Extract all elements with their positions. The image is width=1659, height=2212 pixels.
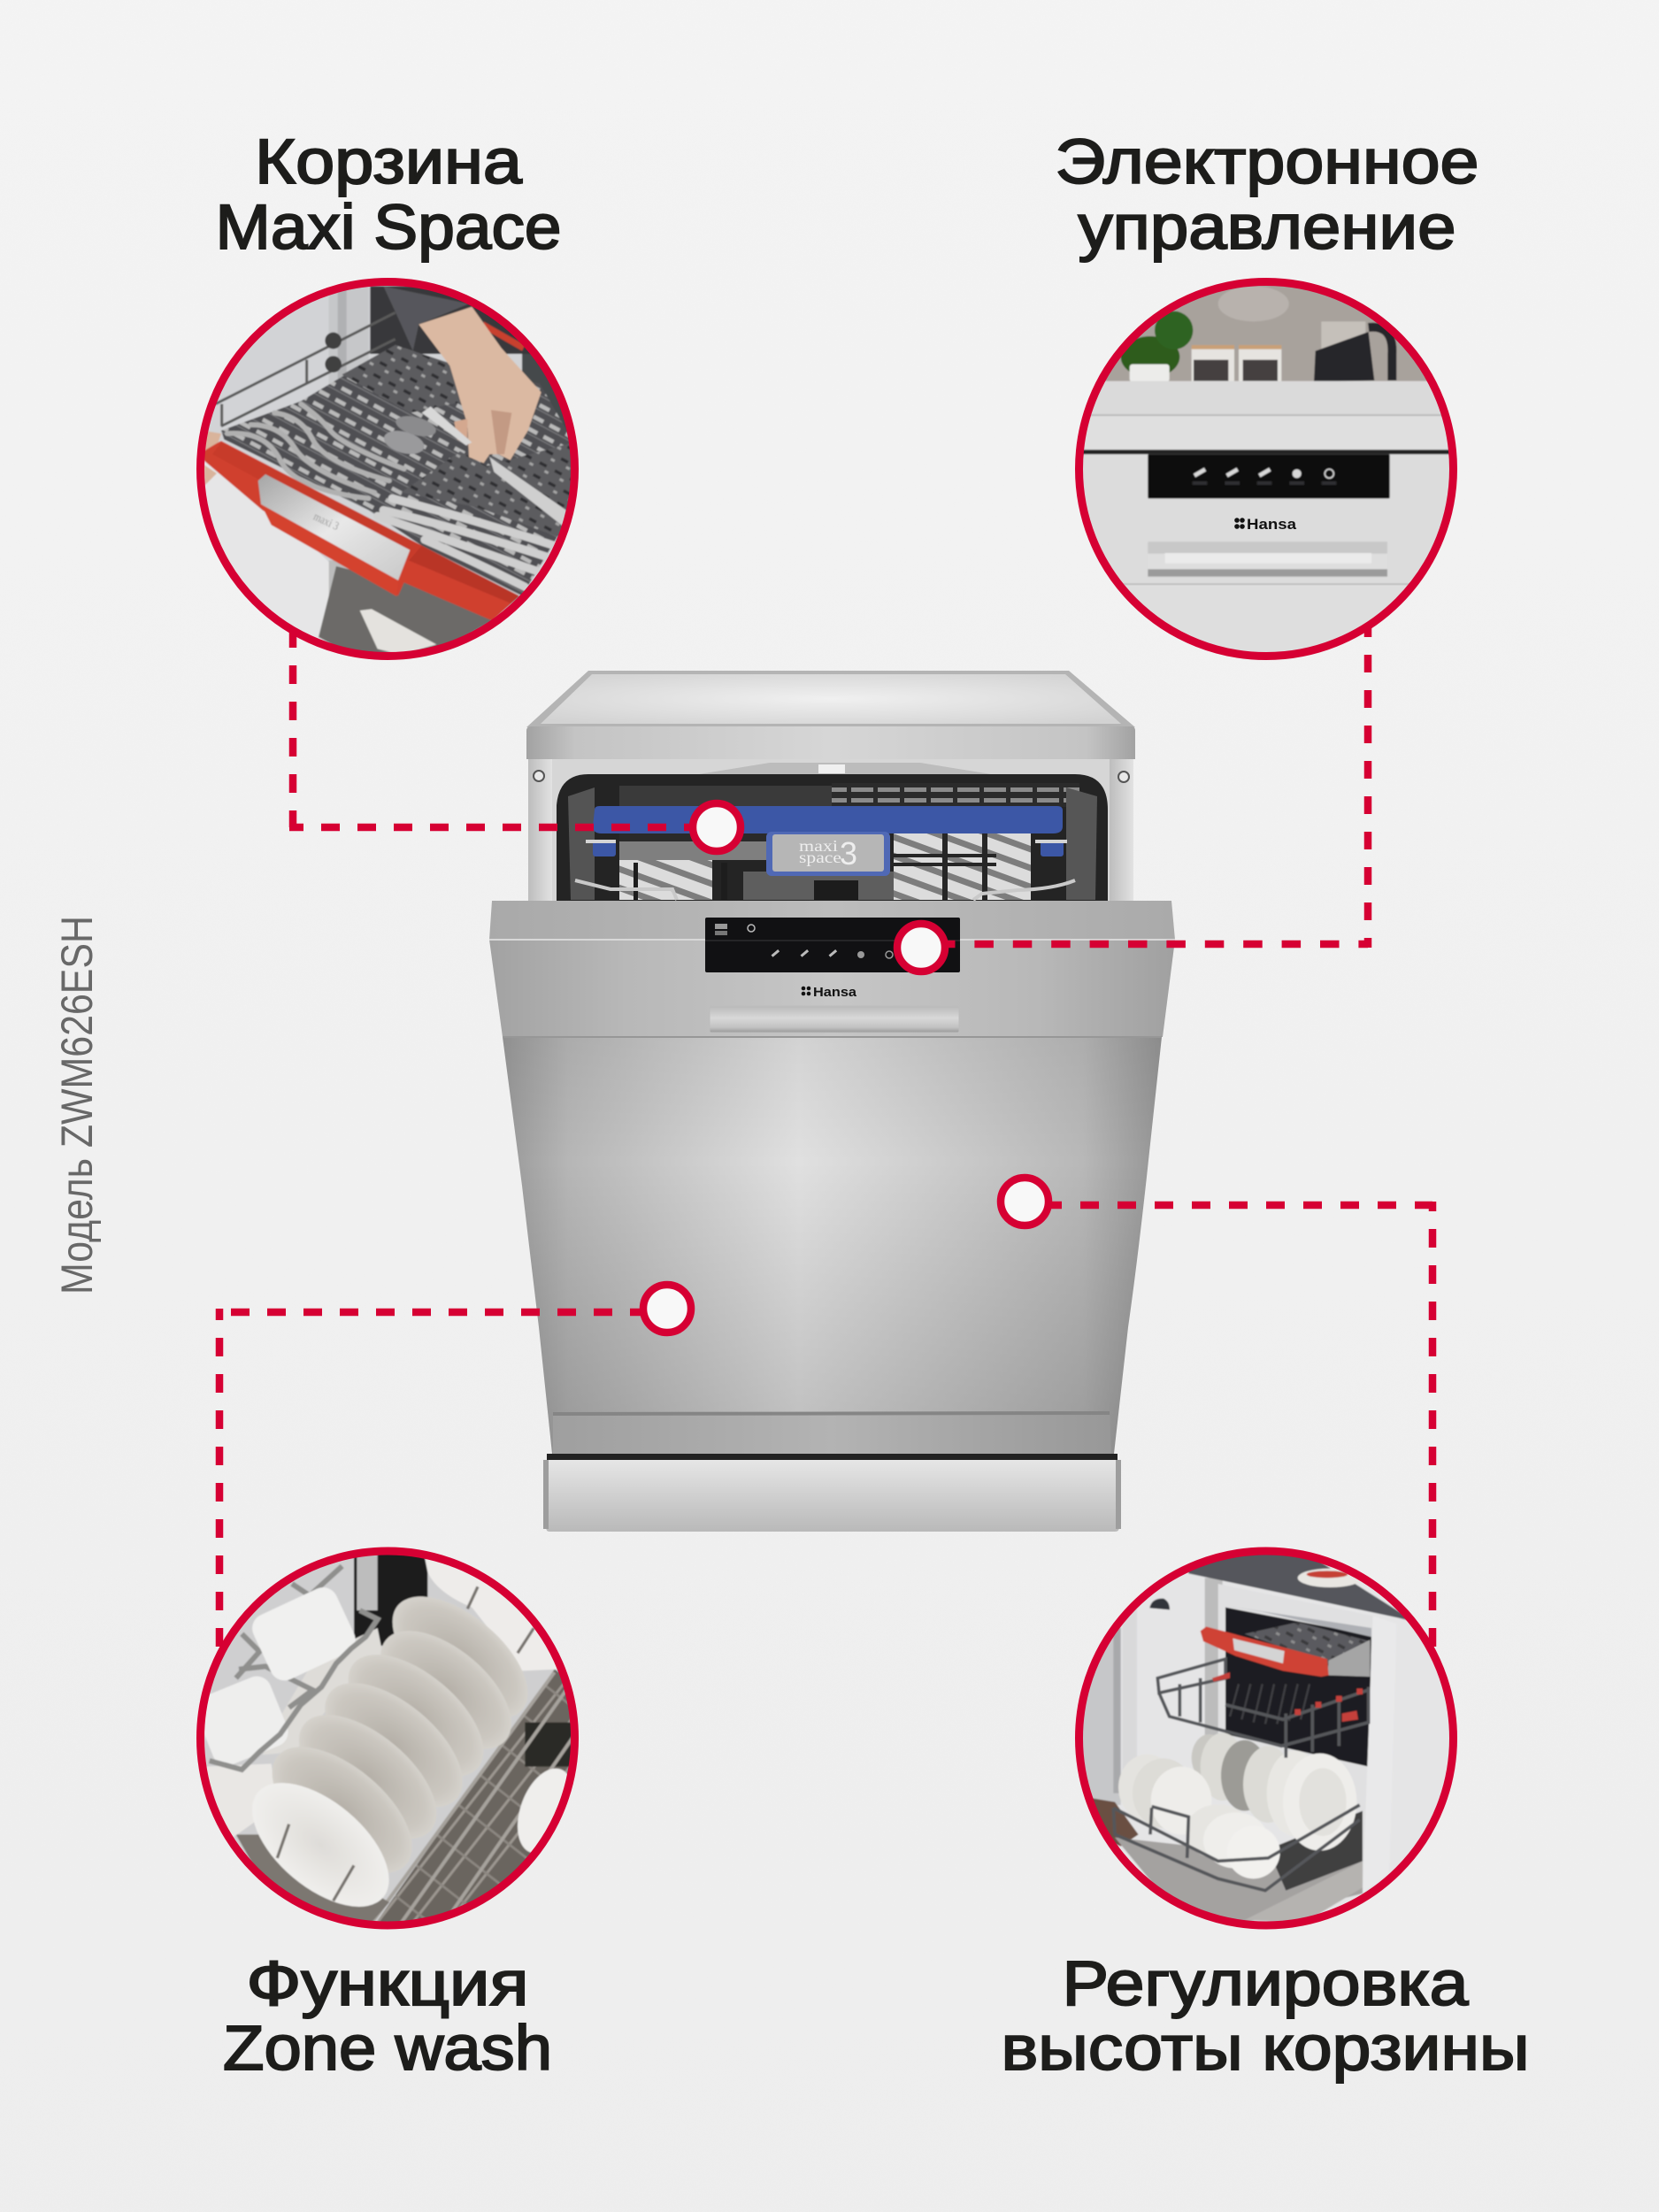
lower door panel xyxy=(503,1037,1162,1454)
photo: Maxi Space basket xyxy=(196,278,579,660)
connector: zone wash xyxy=(216,1309,649,1652)
marker: zone wash xyxy=(643,1285,691,1333)
heading: Корзина Maxi Space xyxy=(216,127,561,263)
heading: Функция Zone wash xyxy=(223,1949,552,2084)
dishwasher xyxy=(489,671,1175,1532)
heading: Электронное управление xyxy=(1055,127,1479,263)
photo ring xyxy=(1079,281,1453,657)
blue basket handle xyxy=(586,806,1067,876)
heading: Регулировка высоты корзины xyxy=(1002,1949,1529,2084)
door face xyxy=(489,940,1175,1037)
model label: Модель ZWM626ESH xyxy=(52,916,102,1294)
photo: Maxi Space basket: maxi 3 xyxy=(311,510,342,533)
maxi space badge: space xyxy=(799,849,841,866)
marker: basket xyxy=(693,803,741,851)
logo: Hansa: Hansa xyxy=(813,985,857,1000)
photo: electronic control xyxy=(1075,278,1457,660)
heading: Функция Zone wash: Zone wash xyxy=(223,2014,552,2084)
photo ring xyxy=(200,1551,575,1925)
heading: Корзина Maxi Space: Maxi Space xyxy=(216,193,561,263)
marker: control xyxy=(897,924,945,972)
top front lip xyxy=(526,726,1135,759)
maxi space badge xyxy=(799,835,857,872)
heading: Корзина Maxi Space: Корзина xyxy=(255,127,523,197)
heading: Регулировка высоты корзины: высоты корзины xyxy=(1002,2014,1529,2084)
heading: Регулировка высоты корзины: Регулировка xyxy=(1062,1949,1469,2019)
cabinet sides xyxy=(528,759,1133,902)
door top slope xyxy=(489,901,1175,940)
photo ring xyxy=(200,281,575,657)
plinth xyxy=(543,1454,1121,1532)
infographic xyxy=(61,138,1525,2084)
connector: control xyxy=(936,619,1368,948)
maxi space badge: maxi xyxy=(799,837,838,855)
heading: Электронное управление: Электронное xyxy=(1055,127,1479,197)
door handle xyxy=(710,1006,959,1033)
heading: Электронное управление: управление xyxy=(1078,193,1456,263)
connector: height adjustment xyxy=(1043,1202,1432,1648)
heading: Функция Zone wash: Функция xyxy=(246,1949,529,2019)
kick strip xyxy=(553,1411,1111,1454)
photo: basket height adjustment xyxy=(1075,1547,1457,1929)
logo: Hansa detail: Hansa xyxy=(1247,516,1297,533)
marker: height adjustment xyxy=(1001,1178,1048,1225)
photo ring xyxy=(1079,1551,1453,1925)
control panel xyxy=(705,918,960,972)
top surface xyxy=(526,671,1135,727)
logo: Hansa detail xyxy=(1234,518,1297,529)
cavity xyxy=(557,763,1108,901)
photo: Zone wash plates xyxy=(196,1547,579,1929)
maxi space badge: 3 xyxy=(840,835,857,872)
connector: basket xyxy=(289,629,690,827)
